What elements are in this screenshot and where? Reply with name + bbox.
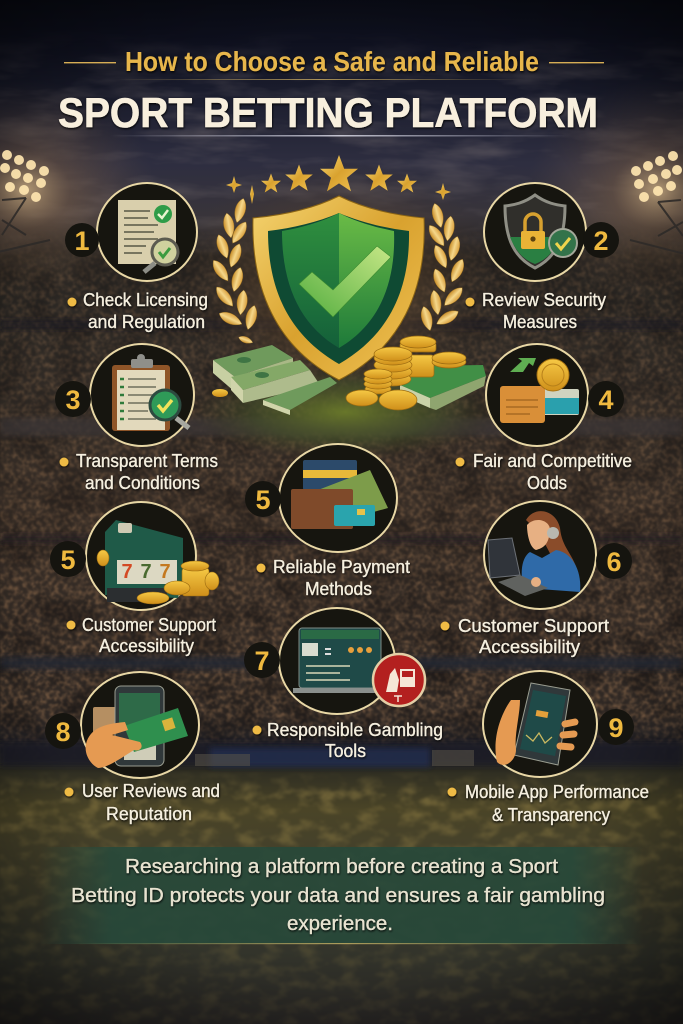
label 6: Accessibility [479,637,580,657]
magnifier [144,239,178,272]
label 4: Fair and Competitive [473,451,632,471]
shield [253,196,424,380]
cash stacks [212,345,486,415]
green arrow [510,358,536,372]
blue shirt [522,550,580,592]
label 2: Measures [503,312,577,332]
label 1: and Regulation [88,312,205,332]
security shield [505,195,565,268]
badge 9 [598,709,634,745]
badge 5 center [245,481,281,517]
stadium floodlight: right [630,151,683,254]
reels 777: 7 [140,561,152,583]
laptop screen [293,628,381,693]
teal payment card [334,505,375,526]
banknotes [318,470,388,520]
stadium floodlight: left [0,150,50,252]
label 6: Customer Support [458,616,609,636]
reels 777 [121,561,171,583]
rating stars [226,155,451,204]
label 9: Mobile App Performance [465,782,649,802]
label 7 [252,720,443,761]
teal card [543,389,579,415]
keyboard and hand [498,575,548,596]
hand [86,722,142,768]
label 5 left: Accessibility [99,636,194,656]
badge 3 [55,381,91,417]
label 2 [466,290,606,332]
item 4: odds icon [486,344,588,446]
label 9 [448,782,649,825]
phone [115,686,164,766]
badge 7 [244,642,280,678]
reels 777: 7 [159,561,171,583]
label 4 [456,451,632,493]
label 5 center: Reliable Payment [273,557,410,577]
label 1: Check Licensing [83,290,208,310]
label 8: User Reviews and [82,781,220,801]
item 1: licensing icon [97,183,197,281]
label 6 [440,616,609,657]
check badge [549,229,577,257]
item 5 left: slot machine icon [86,502,219,610]
clipboard [112,354,170,431]
wallet [291,489,353,529]
badge 9: 9 [608,713,624,743]
badge 3: 3 [65,385,81,415]
badge 7: 7 [254,646,270,676]
gold coins [346,336,466,410]
badge 4 [588,381,624,417]
item 5 center: payment icon [279,444,397,552]
label 9: & Transparency [492,805,610,825]
badge 2 [583,222,619,258]
document [118,200,176,264]
badge 8: 8 [55,717,71,747]
central shield emblem [173,155,503,460]
slot machine body [105,520,183,602]
hand [495,700,520,765]
badge 5 left [50,541,86,577]
padlock [521,214,545,249]
bottom callout [40,847,643,944]
badge 5 center: 5 [255,485,271,515]
item 8: reviews icon [81,672,199,778]
item 6: support agent icon [484,501,596,609]
item 7: responsible gambling icon [279,608,425,714]
label 7: Tools [325,741,366,761]
title: SPORT BETTING PLATFORM [58,89,598,136]
label 3: Transparent Terms [76,451,218,471]
fingers [560,722,575,747]
green card [124,708,188,752]
laurel wreath [209,197,467,345]
label 5 center [256,557,410,599]
phone [514,683,570,765]
bottom callout: Betting ID protects your data and ensures a fair gambling [71,884,605,907]
hair [526,511,578,572]
label 5 center: Methods [305,579,372,599]
red limit badge [373,654,425,706]
badge 5 left: 5 [60,545,76,575]
gold coin [537,359,569,391]
label 8: Reputation [106,804,192,824]
badge 6 [596,543,632,579]
title [58,46,604,136]
item 9: mobile app icon [483,671,597,777]
label 2: Review Security [482,290,606,310]
badge 4: 4 [598,385,614,415]
badge 1 [65,223,99,257]
monitor [488,538,520,578]
label 7: Responsible Gambling [267,720,443,740]
face and neck [527,520,550,550]
label 5 left [66,615,216,656]
badge 2: 2 [593,226,609,256]
label 4: Odds [527,473,567,493]
label 3: and Conditions [85,473,200,493]
item 2: security icon [484,183,586,281]
label 3 [60,451,218,493]
badge 1: 1 [74,226,90,256]
reels 777: 7 [121,561,133,583]
badge 6: 6 [606,547,622,577]
label 8 [64,781,220,824]
orange card [500,386,545,423]
label 1 [68,290,208,332]
bank card [303,460,357,490]
badge 8 [45,713,81,749]
title: How to Choose a Safe and Reliable [125,46,539,77]
headset [547,527,559,539]
item 3: terms icon [90,344,194,446]
label 5 left: Customer Support [82,615,216,635]
bottom callout: Researching a platform before creating a Sport [125,855,558,878]
magnifier [150,390,189,428]
coin stacks [97,550,219,604]
bottom callout: experience. [287,912,393,935]
tan blocks [93,707,117,733]
